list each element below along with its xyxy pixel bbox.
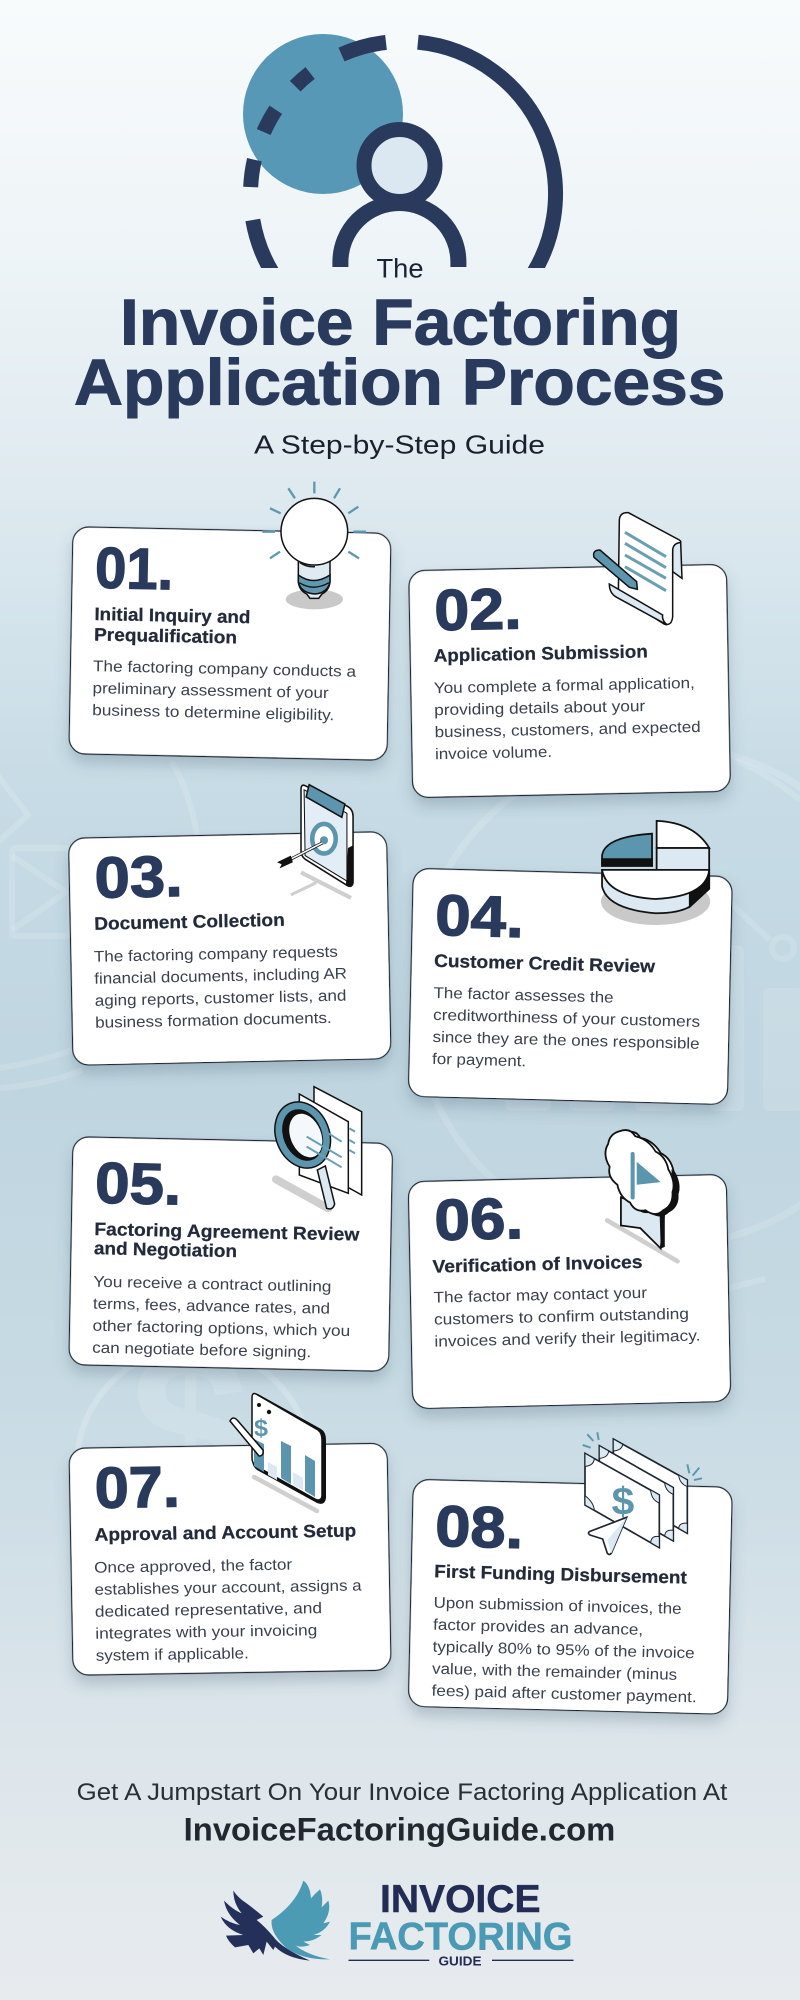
icon: dollar bills and cursor: $ <box>612 1479 634 1523</box>
step description: Upon submission of invoices, the <box>433 1595 682 1618</box>
card background <box>68 832 391 1065</box>
step description: You complete a formal application, <box>434 675 695 697</box>
step description <box>431 1595 699 1706</box>
step description <box>94 1555 363 1665</box>
card background <box>69 1137 393 1371</box>
step description: dedicated representative, and <box>95 1600 322 1621</box>
panel: step 01 <box>69 482 391 760</box>
website: InvoiceFactoringGuide.com <box>184 1812 615 1848</box>
step description: terms, fees, advance rates, and <box>93 1296 330 1318</box>
card background <box>69 1443 391 1675</box>
step number: 03. <box>94 844 183 911</box>
step description: The factor assesses the <box>433 985 614 1007</box>
step number: 06. <box>434 1186 524 1253</box>
step number: 05. <box>95 1151 182 1217</box>
card background <box>408 1174 731 1409</box>
step description <box>92 1274 351 1362</box>
header illustration: person in dashed ring <box>243 34 555 292</box>
card background <box>69 527 391 760</box>
icon: dollar bills and cursor <box>583 1432 702 1554</box>
icon: document and pen <box>594 513 682 625</box>
card background <box>409 564 730 798</box>
step description: business, customers, and expected <box>434 719 701 741</box>
step description: The factor may contact your <box>433 1285 647 1307</box>
step description: fees) paid after customer payment. <box>431 1683 697 1706</box>
call to action <box>77 1779 727 1848</box>
title line: The: The <box>376 254 424 284</box>
title <box>74 254 726 459</box>
step description: creditworthiness of your customers <box>433 1007 701 1031</box>
step description: invoices and verify their legitimacy. <box>434 1328 701 1351</box>
step heading: Customer Credit Review <box>434 951 656 976</box>
step heading <box>94 604 251 648</box>
step description: business formation documents. <box>95 1010 332 1032</box>
card background <box>408 1479 732 1714</box>
panel: step 04 <box>408 821 732 1105</box>
step description: other factoring options, which you <box>92 1318 350 1340</box>
step heading: and Negotiation <box>94 1238 237 1261</box>
step number: 01. <box>95 536 174 602</box>
step description: value, with the remainder (minus <box>432 1661 678 1684</box>
logo wordmark: invoice: INVOICE <box>380 1878 540 1921</box>
logo <box>221 1878 574 1969</box>
step description: system if applicable. <box>96 1645 249 1665</box>
step description: The factoring company conducts a <box>93 658 357 681</box>
step description <box>432 985 701 1075</box>
call to action line: Get A Jumpstart On Your Invoice Factoring Application At <box>77 1779 727 1806</box>
icon: eagle <box>221 1881 330 1961</box>
step heading: Approval and Account Setup <box>94 1521 356 1545</box>
step description: for payment. <box>432 1051 526 1070</box>
subtitle: A Step-by-Step Guide <box>254 429 545 459</box>
step description <box>433 1284 701 1351</box>
step description: The factoring company requests <box>94 944 338 966</box>
title line: Application Process: Application Process <box>74 345 726 418</box>
step heading: Initial Inquiry and <box>94 604 251 627</box>
panel: step 06 <box>408 1130 731 1409</box>
step heading: Document Collection <box>94 910 285 934</box>
step description: Once approved, the factor <box>94 1557 292 1577</box>
step number: 04. <box>435 883 525 950</box>
icon: light bulb <box>262 482 366 609</box>
icon: magnifying glass over documents <box>265 1087 362 1209</box>
icon: tablet with bar chart <box>230 1394 326 1511</box>
icon: tablet with bar chart: $ <box>254 1415 269 1442</box>
step description: factor provides an advance, <box>433 1617 643 1639</box>
step description <box>434 675 701 763</box>
step description: financial documents, including AR <box>94 966 347 988</box>
step heading: Application Submission <box>434 641 648 666</box>
logo wordmark: guide: GUIDE <box>438 1954 482 1969</box>
step description: business to determine eligibility. <box>92 702 334 724</box>
text: $ <box>130 1305 250 1546</box>
step description: can negotiate before signing. <box>92 1340 311 1361</box>
icon: target clipboard with arrow <box>277 785 353 898</box>
step description: preliminary assessment of your <box>92 680 329 702</box>
step description: aging reports, customer lists, and <box>95 988 347 1010</box>
step number: 07. <box>94 1455 180 1521</box>
card background <box>408 868 732 1105</box>
step description: establishes your account, assigns a <box>94 1577 362 1599</box>
step number: 08. <box>435 1494 524 1561</box>
step description: typically 80% to 95% of the invoice <box>432 1639 695 1662</box>
icon: teal circle <box>243 34 403 194</box>
step heading <box>94 1219 361 1264</box>
step description: invoice volume. <box>435 744 552 763</box>
step description: integrates with your invoicing <box>95 1622 318 1643</box>
step description: providing details about your <box>434 698 645 719</box>
step description: customers to confirm outstanding <box>434 1306 689 1329</box>
step heading: Factoring Agreement Review <box>94 1219 361 1245</box>
step description: since they are the ones responsible <box>432 1029 700 1053</box>
logo wordmark: factoring: FACTORING <box>348 1915 572 1958</box>
step description: You receive a contract outlining <box>93 1274 332 1296</box>
panel: step 02 <box>409 513 730 798</box>
icon: ribbon badge with flag <box>605 1130 679 1261</box>
step number: 02. <box>434 576 522 643</box>
icon: dashed ring <box>251 42 555 292</box>
icon: person <box>340 130 458 267</box>
panel: step 05 <box>69 1087 393 1371</box>
panel: step 08 <box>408 1432 732 1714</box>
panel: step 03 <box>68 785 391 1065</box>
panel: step 07 <box>69 1394 391 1675</box>
step heading: Prequalification <box>94 624 237 647</box>
icon: pie chart <box>601 821 710 925</box>
step description <box>92 658 357 725</box>
step heading: Verification of Invoices <box>432 1252 643 1277</box>
title line: Invoice Factoring: Invoice Factoring <box>120 285 681 358</box>
step heading: First Funding Disbursement <box>434 1561 687 1588</box>
step description <box>94 944 348 1032</box>
